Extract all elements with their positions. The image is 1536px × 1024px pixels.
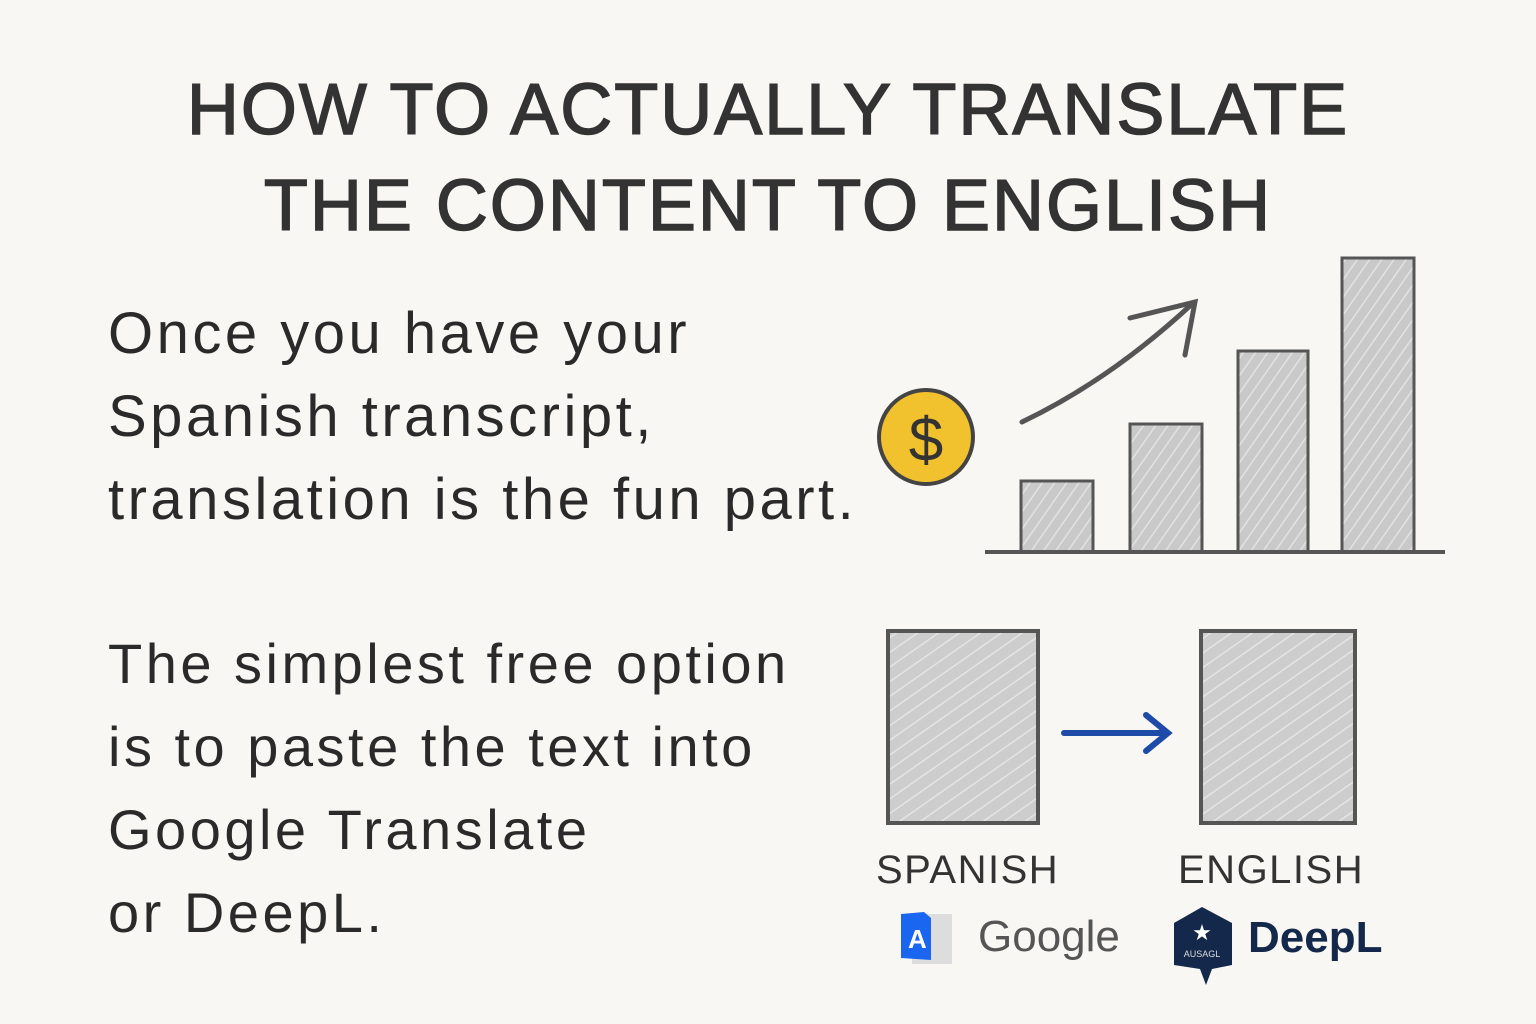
text block: intro: Once you have your xyxy=(108,301,690,366)
label: english: ENGLISH xyxy=(1178,848,1364,892)
text block: simplest option: Google Translate xyxy=(108,798,590,861)
text block: simplest option xyxy=(108,632,790,944)
title xyxy=(187,70,1349,246)
text block: simplest option: The simplest free option xyxy=(108,632,790,695)
diagram: spanish to english documents xyxy=(886,629,1357,825)
logo: google translate xyxy=(901,912,1120,964)
icon: coin: $ xyxy=(909,406,943,475)
text block: intro xyxy=(108,301,857,532)
text block: intro: translation is the fun part. xyxy=(108,467,857,532)
title: HOW TO ACTUALLY TRANSLATE xyxy=(187,70,1349,150)
arrow: trend up xyxy=(1022,302,1195,422)
bars xyxy=(1021,258,1414,552)
logo: deepl: AUSAGL xyxy=(1184,949,1220,959)
text block: simplest option: or DeepL. xyxy=(108,881,385,944)
chart: growth bars with coin xyxy=(877,256,1445,554)
logo: google translate: A xyxy=(908,924,927,954)
arrow: translate xyxy=(1064,715,1168,751)
text block: simplest option: is to paste the text into xyxy=(108,715,756,778)
label: spanish: SPANISH xyxy=(876,848,1059,892)
document: english xyxy=(1201,631,1355,823)
title: THE CONTENT TO ENGLISH xyxy=(264,166,1272,246)
text block: intro: Spanish transcript, xyxy=(108,384,655,449)
document: spanish xyxy=(888,631,1038,823)
logo: deepl xyxy=(1174,907,1382,985)
logo: deepl: ★ xyxy=(1192,920,1212,945)
logo: deepl: DeepL xyxy=(1248,913,1382,962)
logo: google translate: Google xyxy=(978,912,1120,961)
icon: coin xyxy=(879,390,973,484)
